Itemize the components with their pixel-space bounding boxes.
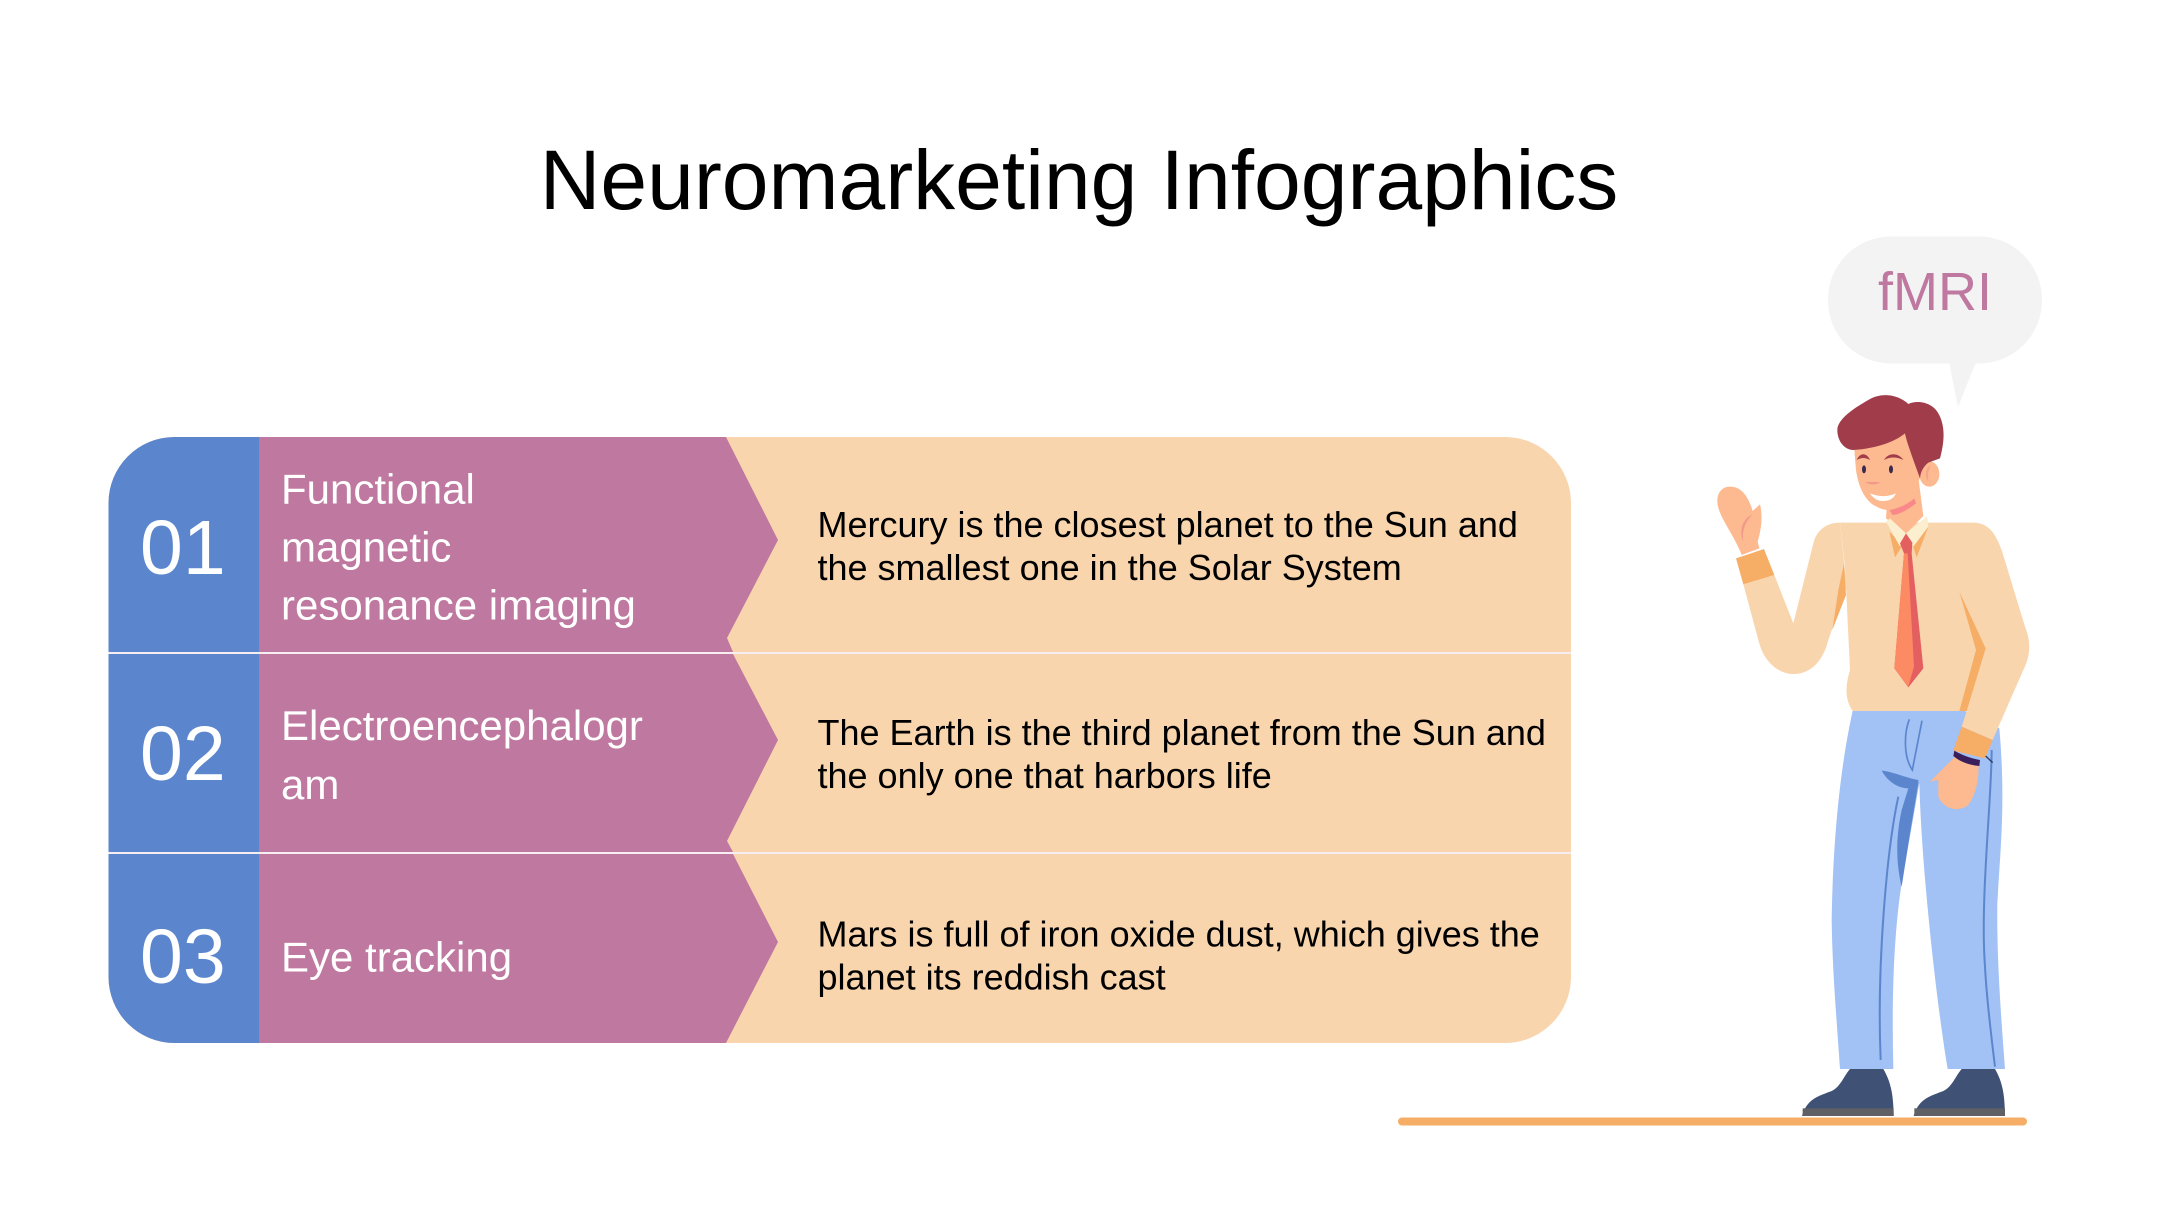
raised hand <box>1717 487 1761 555</box>
trousers <box>1832 711 2005 1069</box>
row separator lines <box>108 652 1571 854</box>
cuffs <box>1736 549 1993 758</box>
row 03: eye tracking: planet its reddish cast <box>818 956 1166 998</box>
row 01: functional magnetic resonance imaging: 01 <box>140 505 226 591</box>
illustration: man waving <box>1717 395 2029 1116</box>
row 01: functional magnetic resonance imaging: resonance imaging <box>281 582 636 628</box>
row 03: eye tracking: Eye tracking <box>281 934 512 980</box>
speech bubble <box>1828 236 2042 407</box>
row 02: electroencephalogram <box>108 654 1571 852</box>
row 01: functional magnetic resonance imaging: Mercury is the closest planet to the Sun and <box>818 504 1518 545</box>
title: Neuromarketing Infographics <box>540 133 1618 227</box>
shirt <box>1743 523 2029 740</box>
row 02: electroencephalogram: 02 <box>140 711 226 797</box>
row 01: functional magnetic resonance imaging: Functional <box>281 466 475 512</box>
row 01: functional magnetic resonance imaging <box>108 437 1571 652</box>
row 03: eye tracking <box>108 854 1571 1043</box>
row 01: functional magnetic resonance imaging: magnetic <box>281 524 451 570</box>
row 02: electroencephalogram: Electroencephalogr <box>281 702 643 749</box>
row 03: eye tracking: 03 <box>140 914 226 1000</box>
collar <box>1886 516 1928 557</box>
panel: comparison table <box>108 437 1571 1043</box>
necktie <box>1894 533 1923 687</box>
row 02: electroencephalogram: the only one that harbors life <box>818 755 1272 796</box>
row 02: electroencephalogram: am <box>281 761 339 808</box>
row 03: eye tracking: Mars is full of iron oxide dust, which gives the <box>818 914 1540 954</box>
shoes <box>1802 1069 2005 1116</box>
lower hand and wristband <box>1930 751 1993 809</box>
row 02: electroencephalogram: The Earth is the third planet from the Sun and <box>818 712 1546 753</box>
head and neck <box>1837 395 1944 533</box>
speech bubble: fMRI <box>1878 262 1992 322</box>
floor line <box>1398 1118 2027 1126</box>
row 01: functional magnetic resonance imaging: the smallest one in the Solar System <box>818 547 1402 588</box>
